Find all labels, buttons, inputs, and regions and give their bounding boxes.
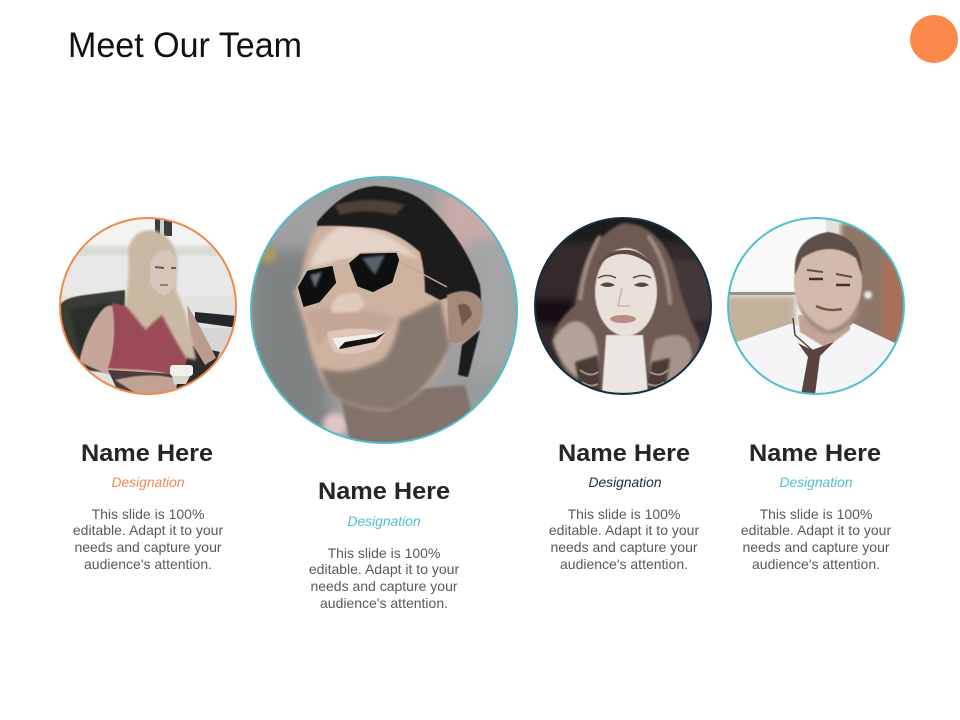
designation 1: Designation: [112, 474, 185, 490]
neck and chest: [602, 335, 648, 393]
description 2: [309, 545, 459, 611]
ear: [447, 291, 483, 343]
description 1: needs and capture your: [74, 539, 222, 555]
nose: [331, 292, 365, 313]
team member 2 text: [309, 478, 459, 611]
description 2: audience's attention.: [320, 595, 448, 611]
description 2: needs and capture your: [310, 578, 458, 594]
face: [595, 248, 657, 336]
name 2: Name Here: [318, 478, 450, 505]
sunglasses: [297, 265, 337, 308]
description 3: editable. Adapt it to your: [549, 522, 699, 538]
description 2: editable. Adapt it to your: [309, 561, 459, 577]
eyes: [600, 282, 649, 287]
description 1: [73, 506, 223, 572]
decorative orange circle: [910, 15, 958, 63]
neck: [798, 315, 850, 348]
description 1: editable. Adapt it to your: [73, 522, 223, 538]
designation 3: Designation: [588, 474, 662, 490]
mouth: [327, 328, 387, 354]
description 2: This slide is 100%: [328, 545, 440, 561]
name 3: Name Here: [558, 440, 690, 467]
description 3: needs and capture your: [550, 539, 698, 555]
designation 4: Designation: [780, 474, 853, 490]
tie: [798, 342, 834, 395]
face: [292, 225, 450, 412]
team member 4 text: [741, 440, 891, 572]
name 1: Name Here: [81, 440, 213, 467]
team member 1 text: [73, 440, 223, 572]
nose: [618, 288, 630, 306]
description 4: editable. Adapt it to your: [741, 522, 891, 538]
cheek: [308, 309, 391, 341]
portrait 1: woman on sofa: [58, 216, 240, 396]
portrait 3: woman with curly hair: [533, 216, 715, 396]
hair: [317, 186, 481, 312]
beard: [320, 300, 450, 410]
description 4: [741, 506, 891, 572]
eyes: [809, 279, 850, 285]
description 3: This slide is 100%: [568, 506, 680, 522]
description 4: audience's attention.: [752, 556, 880, 572]
title: Meet Our Team: [68, 26, 302, 65]
designation 2: Designation: [348, 513, 421, 529]
description 4: needs and capture your: [742, 539, 890, 555]
description 3: audience's attention.: [560, 556, 688, 572]
description 4: This slide is 100%: [760, 506, 872, 522]
portrait 4: man in shirt and tie: [725, 216, 910, 400]
head: [794, 248, 862, 330]
description 1: This slide is 100%: [92, 506, 204, 522]
lips: [610, 315, 636, 323]
description 3: [549, 506, 699, 572]
portrait 2: smiling man with sunglasses: [250, 176, 520, 450]
description 1: audience's attention.: [84, 556, 212, 572]
team member 3 text: [549, 440, 699, 572]
mouth: [816, 306, 842, 310]
neck: [340, 384, 472, 442]
name 4: Name Here: [749, 440, 881, 467]
hair: [552, 223, 700, 395]
stubble: [797, 298, 860, 334]
shirt: [737, 323, 895, 351]
